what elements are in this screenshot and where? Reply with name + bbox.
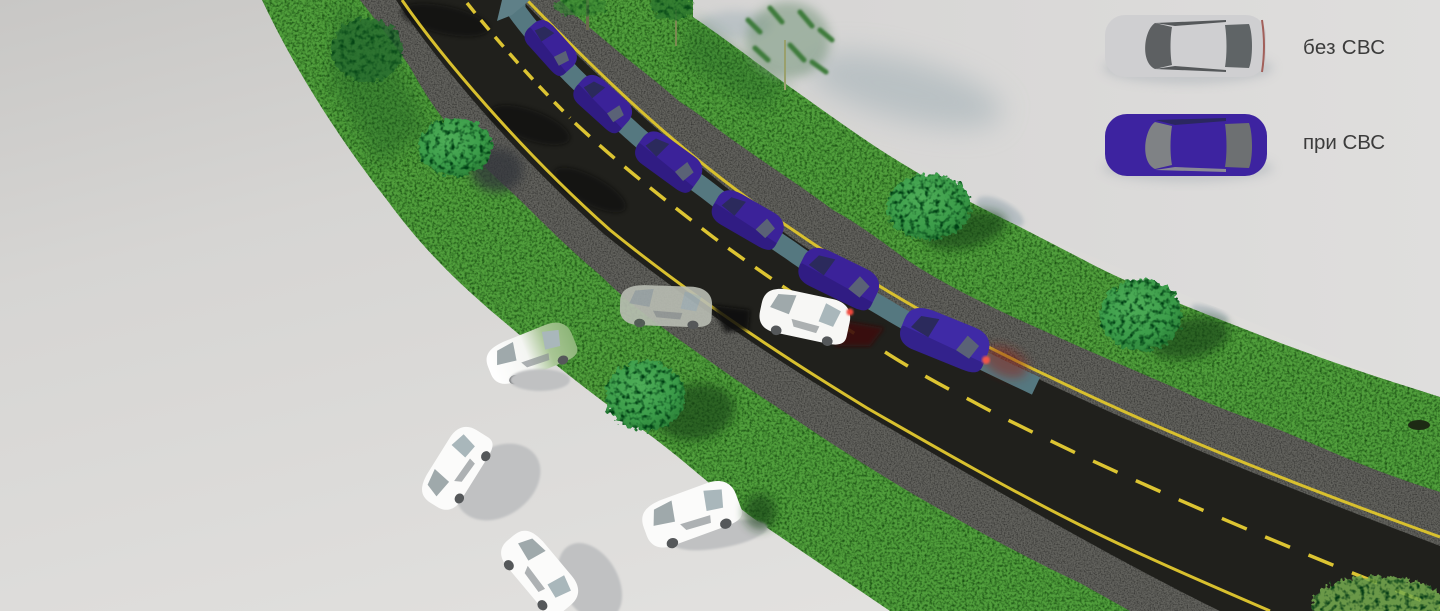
legend car without system (1103, 15, 1273, 84)
legend car with system (1103, 114, 1273, 182)
left yellow edge line (402, 0, 1270, 611)
centre dashed line (467, 3, 1440, 608)
bush 1 (418, 118, 492, 176)
tree shadows on ground (699, 11, 1231, 325)
purple car 2 (568, 69, 638, 137)
purple cars braking sequence (520, 15, 995, 376)
bush shadow on shoulder (471, 148, 523, 192)
white car without stability control (756, 285, 854, 350)
tree shadows on road (398, 0, 632, 221)
bush 4 (605, 361, 685, 431)
dark tree crown left (331, 18, 403, 82)
car leaving road (482, 317, 581, 391)
purple car 4 (707, 184, 789, 254)
dark grass shading (330, 0, 790, 165)
arrowhead (497, 0, 530, 21)
brake shadow white car (835, 320, 884, 346)
ghost shadow (712, 305, 750, 332)
hole in grass (1408, 420, 1430, 430)
paved shoulders (360, 0, 1440, 611)
brake glow purple car (977, 339, 1033, 385)
asphalt road (396, 0, 1440, 611)
parked car shadows (441, 369, 770, 611)
sapling top centre (554, 0, 606, 30)
bush shadows on grass (651, 204, 1233, 530)
spun-out car 1 (415, 420, 499, 517)
purple car 3 (630, 125, 708, 197)
brake light (982, 356, 990, 364)
purple car 5 (793, 242, 885, 314)
right yellow edge line (527, 0, 1440, 537)
bush 3 (1100, 279, 1182, 351)
legend label with system: при СВС (1303, 131, 1385, 154)
upper right ground (690, 0, 1440, 400)
spun-out car 2 (637, 475, 746, 555)
ghost car on shoulder (619, 284, 713, 330)
sapling top (650, 0, 694, 46)
purple car 1 (520, 15, 582, 79)
legend (1103, 15, 1385, 182)
purple car 6 (895, 302, 995, 376)
sapling right (746, 2, 832, 90)
bush 2 (887, 174, 971, 240)
sapling bottom right (1312, 576, 1440, 611)
brake light (846, 308, 854, 316)
trajectory arrow (497, 0, 1036, 386)
legend label without system: без СВС (1303, 36, 1385, 59)
spun-out car 3 (493, 523, 586, 611)
